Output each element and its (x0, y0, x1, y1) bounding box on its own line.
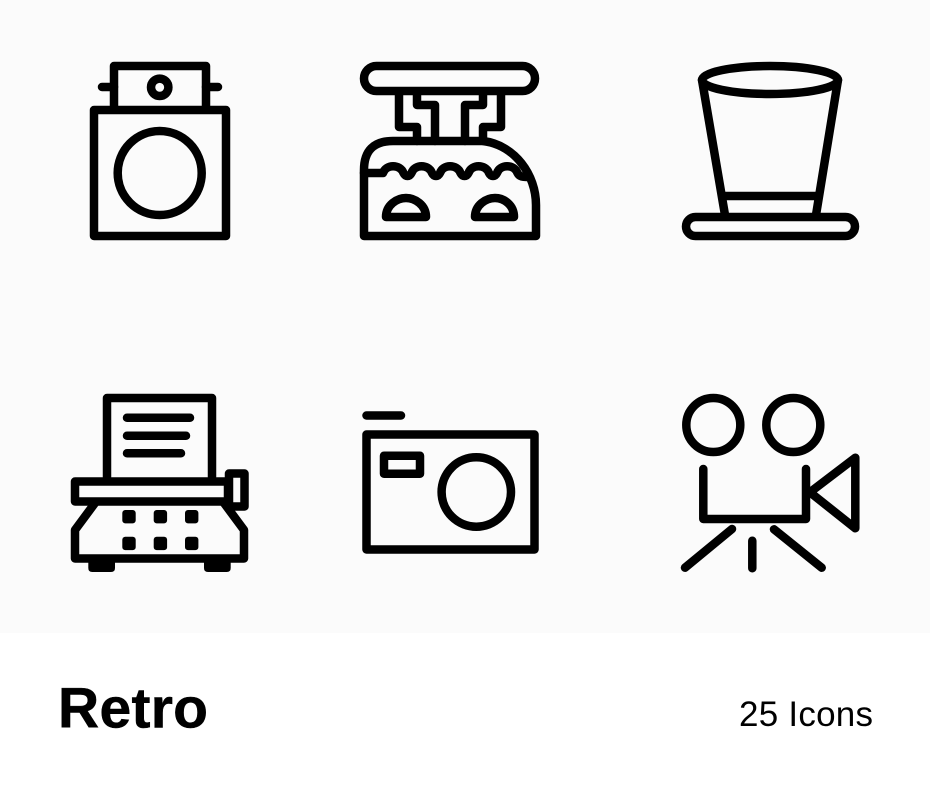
title: Retro (58, 677, 208, 741)
icon: instant camera (94, 66, 226, 236)
icon: kitchen scale (364, 66, 536, 236)
icon: typewriter (75, 398, 244, 572)
icon: movie camera (685, 398, 855, 568)
icon: top hat (686, 66, 855, 236)
icon count label: 25 Icons (739, 695, 873, 734)
icon: compact camera (366, 416, 534, 550)
